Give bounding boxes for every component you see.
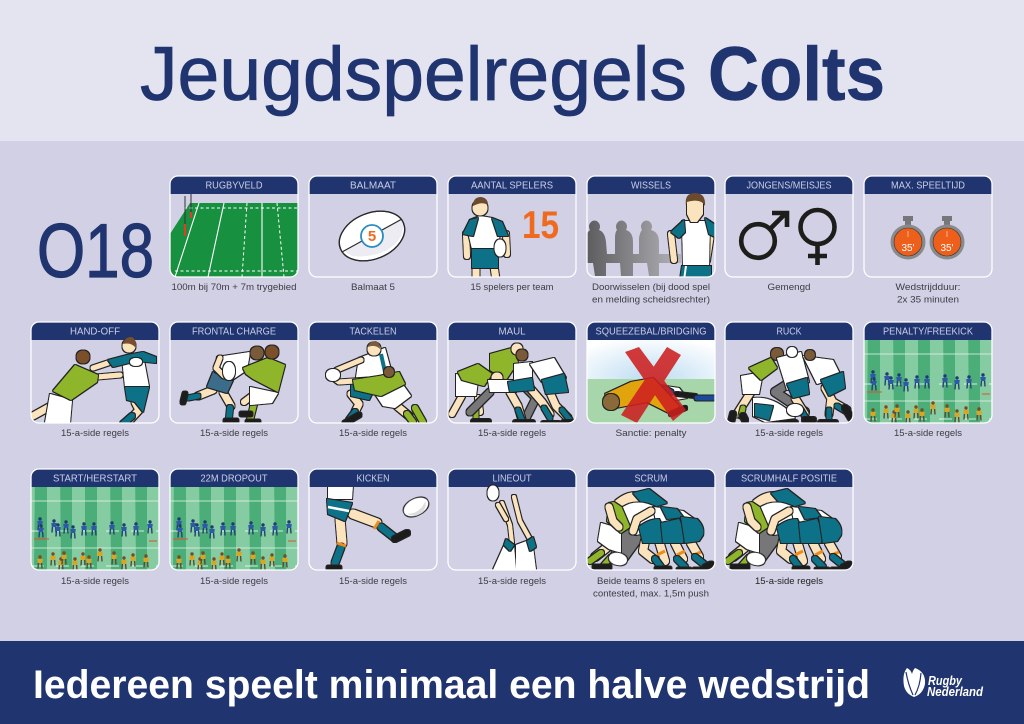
panel: balmaat: [309, 176, 437, 293]
number: 15 players: 15: [522, 204, 559, 247]
header: 22M DROPOUT: [200, 474, 268, 484]
illustration: player: [463, 197, 508, 280]
header: RUGBYVELD: [206, 180, 262, 192]
panel: max. speeltijd: [864, 176, 992, 306]
illustration: pitch with players: [32, 487, 158, 570]
caption: en melding scheidsrechter): [592, 294, 710, 306]
illustration: maul: [452, 344, 574, 424]
caption: 15-a-side regels: [478, 576, 546, 587]
header: MAX. SPEELTIJD: [891, 180, 965, 192]
illustration: lineout jump: [488, 486, 536, 570]
logo: Rugby Nederland: [903, 668, 983, 699]
panel: maul: [448, 322, 576, 439]
panel: ruck: [725, 322, 853, 439]
illustration: frontal charge: [183, 346, 285, 422]
illustration: tackle: [326, 341, 423, 423]
panel: lineout: [448, 469, 576, 587]
header: SCRUM: [634, 474, 668, 484]
icon: stopwatch two: 35': [940, 243, 954, 254]
icon: female symbol: [800, 210, 834, 265]
header: JONGENS/MEISJES: [746, 180, 832, 192]
panel: 22m dropout: [170, 469, 298, 587]
header: KICKEN: [356, 474, 390, 484]
caption: 15 spelers per team: [470, 282, 554, 293]
caption: 15-a-side regels: [200, 428, 268, 439]
illustration: rugby field: [170, 193, 298, 277]
caption: Wedstrijdduur:: [896, 282, 960, 293]
panel: hand-off: [31, 322, 159, 439]
header: HAND-OFF: [70, 326, 120, 338]
panel: frontal charge: [170, 322, 298, 439]
panel: aantal spelers: [448, 176, 576, 293]
panel: start/herstart: [31, 469, 159, 587]
illustration: pitch with players: [170, 487, 298, 570]
caption: contested, max. 1,5m push: [593, 588, 709, 600]
header: WISSELS: [631, 180, 671, 192]
caption: Balmaat 5: [351, 282, 395, 293]
caption: 15-a-side regels: [894, 428, 962, 439]
panel: rugbyveld: [170, 176, 298, 293]
caption: 2x 35 minuten: [897, 294, 959, 306]
panel: wissels: [587, 176, 717, 306]
illustration: ruck: [731, 347, 851, 423]
caption: [592, 282, 710, 306]
header: BALMAAT: [350, 180, 396, 192]
illustration: squeeze ball with red cross: [588, 340, 714, 422]
header: TACKELEN: [350, 326, 396, 338]
caption: 15-a-side regels: [339, 428, 407, 439]
header: SCRUMHALF POSITIE: [741, 474, 837, 484]
caption: [593, 576, 709, 600]
caption: 15-a-side regels: [339, 576, 407, 587]
caption: 15-a-side regels: [755, 428, 823, 439]
illustration: kicking leg and ball: [327, 484, 431, 568]
title: Colts: [708, 32, 885, 117]
panel: tackelen: [309, 322, 437, 439]
panel: scrum: [587, 469, 715, 600]
caption: 15-a-side regels: [755, 576, 823, 587]
caption: 15-a-side regels: [61, 576, 129, 587]
caption: 100m bij 70m + 7m trygebied: [172, 282, 296, 293]
logo: Rugby Nederland: Nederland: [927, 685, 983, 699]
illustration: pitch with players: [864, 340, 992, 422]
caption: [896, 282, 960, 306]
icon: ball size 5: 5: [368, 228, 376, 245]
title: Jeugdspelregels: [140, 32, 687, 117]
panel: scrumhalf positie: [725, 469, 853, 587]
panel: squeezebal/bridging: [587, 322, 715, 439]
panel: jongens/meisjes: [725, 176, 853, 293]
caption: Doorwisselen (bij dood spel: [592, 282, 710, 293]
icon: stopwatch one: 35': [901, 243, 915, 254]
header: MAUL: [498, 326, 526, 338]
footer band: [0, 641, 1024, 724]
illustration: substitutes and player: [587, 193, 717, 280]
caption: Sanctie: penalty: [616, 428, 687, 439]
caption: 15-a-side regels: [200, 576, 268, 587]
header: SQUEEZEBAL/BRIDGING: [596, 326, 707, 338]
illustration: scrum: [590, 489, 711, 570]
illustration: hand-off: [33, 337, 156, 426]
icon: male symbol: [741, 213, 787, 258]
age group heading: O18: [37, 209, 154, 294]
header: LINEOUT: [492, 474, 532, 484]
illustration: scrum: [728, 489, 849, 570]
logo: Rugby Nederland: Rugby: [928, 674, 963, 688]
header: START/HERSTART: [53, 474, 137, 484]
panel: kicken: [309, 469, 437, 587]
title band: [0, 0, 1024, 141]
caption: Gemengd: [768, 282, 810, 293]
panel: penalty/freekick: [864, 322, 992, 439]
header: AANTAL SPELERS: [471, 180, 553, 192]
header: FRONTAL CHARGE: [192, 326, 276, 338]
header: RUCK: [776, 326, 802, 338]
caption: Beide teams 8 spelers en: [597, 576, 705, 587]
caption: 15-a-side regels: [61, 428, 129, 439]
footer message: Iedereen speelt minimaal een halve wedstrijd: [33, 663, 870, 707]
caption: 15-a-side regels: [478, 428, 546, 439]
header: PENALTY/FREEKICK: [883, 326, 973, 338]
